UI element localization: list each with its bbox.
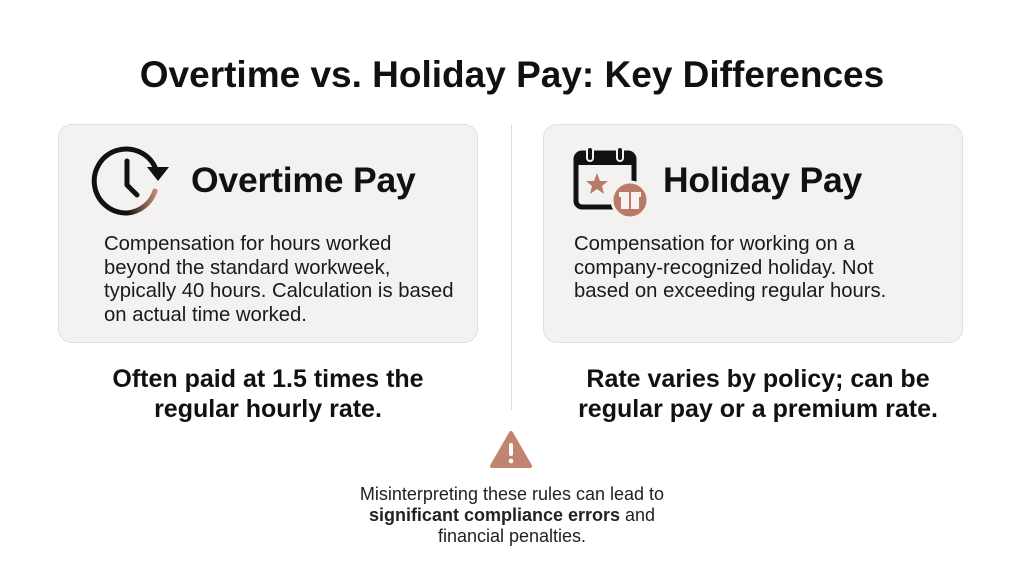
description xyxy=(574,233,886,302)
description: on actual time worked. xyxy=(104,304,307,326)
note: holiday rate xyxy=(578,365,938,423)
note: overtime rate xyxy=(112,365,424,423)
warning text: financial penalties. xyxy=(438,526,586,546)
note: holiday rate: regular pay or a premium rate. xyxy=(578,395,938,423)
note: holiday rate: Rate varies by policy; can be xyxy=(586,365,930,393)
description: company-recognized holiday. Not xyxy=(574,256,874,278)
warning text: Misinterpreting these rules can lead to xyxy=(360,484,664,504)
description xyxy=(104,233,453,326)
panel: holiday pay xyxy=(543,124,963,343)
heading: Holiday Pay xyxy=(663,160,862,200)
note: overtime rate: Often paid at 1.5 times the xyxy=(112,365,424,393)
description: based on exceeding regular hours. xyxy=(574,280,886,302)
icon: warning xyxy=(490,430,532,468)
description: Compensation for hours worked xyxy=(104,233,391,255)
icon: clock with arrow xyxy=(92,146,169,216)
description: Compensation for working on a xyxy=(574,233,855,255)
panel: overtime pay xyxy=(58,124,478,343)
note: overtime rate: regular hourly rate. xyxy=(154,395,382,423)
heading: Overtime Pay xyxy=(191,160,416,200)
description: typically 40 hours. Calculation is based xyxy=(104,280,453,302)
warning text xyxy=(360,484,664,546)
warning text: significant compliance errors and xyxy=(369,505,655,525)
title: Overtime vs. Holiday Pay: Key Differences xyxy=(140,54,884,95)
icon: calendar with gift xyxy=(574,148,646,216)
description: beyond the standard workweek, xyxy=(104,256,390,278)
